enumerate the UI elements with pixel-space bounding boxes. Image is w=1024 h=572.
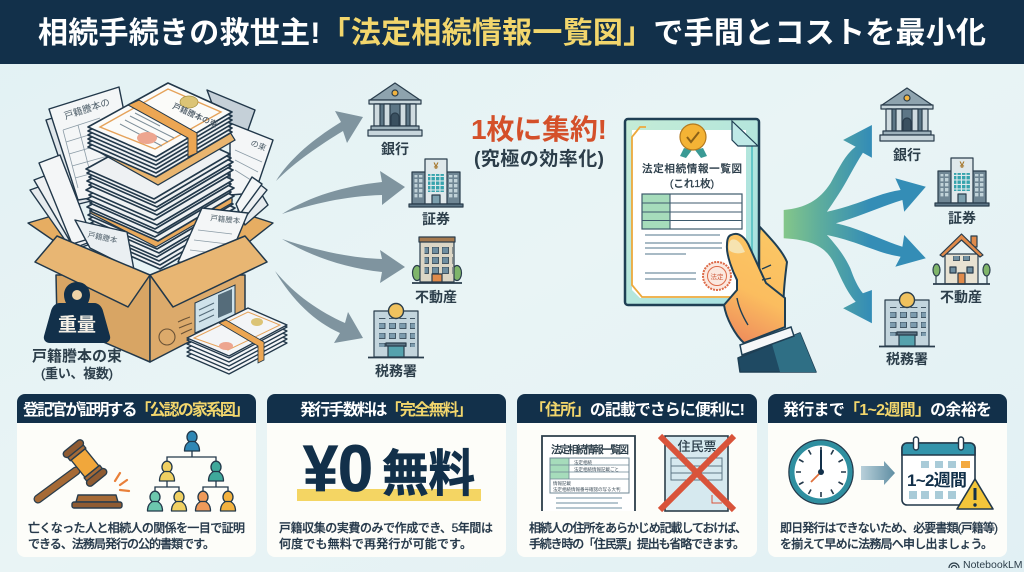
medal	[680, 124, 707, 158]
panel: lead time	[768, 394, 1007, 557]
heading: 登記官が証明する「公認の家系図」	[23, 400, 250, 419]
label: securities: 証券	[948, 210, 976, 226]
red seal: 法定	[710, 272, 724, 281]
thumb and palm	[724, 234, 785, 343]
text block: 即日発行はできないため、必要書類(戸籍等)	[780, 520, 998, 535]
heading	[768, 394, 1007, 423]
icon: bank (right)	[880, 88, 934, 141]
loose family-register sheets behind stack: 戸籍謄本の	[63, 96, 112, 122]
orange envelope upper	[90, 132, 235, 185]
label: bank: 銀行	[381, 141, 409, 157]
big number: ¥0	[303, 431, 373, 505]
loose family-register sheets behind stack: の束	[249, 139, 267, 153]
heading: 「住所」の記載でさらに便利に!	[530, 400, 745, 419]
illustration: one-page certificate in hand	[625, 119, 816, 372]
main paper stack: 戸籍謄本の束	[171, 101, 219, 129]
icon: securities (left)	[409, 159, 463, 207]
text block: 戸籍収集の実費のみで作成でき、5年間は	[279, 520, 493, 535]
big number: 無料	[382, 446, 475, 502]
main paper stack	[86, 83, 236, 269]
heading: 発行手数料は「完全無料」	[300, 400, 473, 419]
label: bundle name: (重い、複数)	[41, 366, 113, 381]
label: real estate: 不動産	[940, 289, 982, 305]
heading: 発行まで「1~2週間」の余裕を	[783, 401, 992, 419]
heading	[517, 394, 757, 423]
title: 相続手続きの救世主!「法定相続情報一覧図」で手間とコストを最小化	[38, 17, 986, 50]
loose sheets in front of stack: 戸籍謄本	[210, 212, 241, 226]
box stamp	[159, 317, 192, 345]
document excerpt: 法定相続情報番号確認の写る大判	[553, 486, 621, 493]
label: tax office: 税務署	[886, 351, 928, 367]
heading	[17, 394, 256, 423]
callout: consolidated: (究極の効率化)	[474, 148, 604, 170]
certificate sheet: (これ1枚)	[670, 177, 714, 190]
crossed-out resident card	[660, 436, 734, 511]
orange envelope lower	[90, 195, 232, 247]
icon: house (right)	[933, 234, 990, 284]
arrow to tax office	[275, 271, 363, 343]
highlight bar	[297, 489, 481, 501]
icon: tax office (left)	[368, 304, 424, 358]
panel: official family tree	[17, 394, 256, 557]
document excerpt: 法定相続情報記載ごと	[574, 466, 619, 473]
weight icon: 重量	[58, 314, 96, 336]
icon: warning	[957, 479, 993, 509]
loose sheets in front of stack: 戸籍謄本	[87, 229, 119, 245]
title bar	[0, 0, 1024, 64]
label: tax office: 税務署	[375, 363, 417, 379]
paper band	[128, 100, 197, 157]
folded corner	[732, 121, 758, 146]
icon: real estate (left)	[412, 237, 462, 283]
callout: consolidated	[471, 114, 607, 170]
heading	[267, 394, 506, 423]
icon: bank (left)	[368, 83, 422, 136]
label: bundle name: 戸籍謄本の束	[32, 347, 122, 365]
label: securities: 証券	[422, 211, 450, 227]
label: bank: 銀行	[893, 147, 921, 163]
icon: tax office (right)	[879, 292, 935, 346]
arrows: after, branching from certificate	[784, 125, 926, 323]
arrow to securities	[282, 171, 405, 214]
small bundle	[187, 308, 287, 374]
box back flaps	[28, 215, 273, 245]
icon: gavel	[38, 438, 122, 508]
red cross	[660, 436, 734, 510]
arrows: before, to institutions	[275, 111, 405, 343]
arrow	[861, 461, 895, 485]
text block	[279, 520, 493, 551]
icon: calendar	[902, 437, 975, 505]
illustration: box of paper bundles	[28, 83, 287, 381]
icon: impact marks	[115, 473, 129, 491]
loose family-register sheets behind stack	[30, 87, 273, 250]
certificate details on top sheet	[100, 89, 221, 149]
panel: address note	[517, 394, 757, 557]
text block: 手続き時の「住民票」提出も省略できます。	[529, 536, 745, 551]
certificate sheet	[625, 119, 759, 305]
shirt cuff	[740, 327, 794, 355]
box faces	[35, 236, 267, 362]
shipping label	[195, 285, 235, 333]
callout: consolidated: 1枚に集約!	[471, 114, 607, 145]
document excerpt	[542, 436, 635, 511]
top sheet	[88, 83, 232, 157]
panel: free of charge	[267, 394, 506, 557]
red seal	[703, 262, 731, 290]
text block: 相続人の住所をあらかじめ記載しておけば、	[529, 520, 747, 535]
big number	[303, 431, 475, 505]
loose sheets in front of stack	[75, 208, 248, 270]
text block: を揃えて早めに法務局へ申し出ましょう。	[780, 536, 993, 551]
text block	[529, 520, 747, 551]
text block: 何度でも無料で再発行が可能です。	[279, 536, 472, 551]
credit: NotebookLM: NotebookLM	[963, 559, 1023, 571]
certificate table	[642, 194, 742, 229]
crossed-out resident card: 住民票	[677, 439, 717, 454]
family tree	[148, 431, 236, 511]
icon: clock	[789, 440, 853, 504]
arrow to bank	[276, 111, 363, 181]
icon: calendar: 1~2週間	[907, 471, 967, 490]
arrow to real estate	[282, 239, 405, 283]
fingers behind sheet	[750, 227, 787, 330]
weight icon	[44, 282, 110, 343]
text block	[28, 520, 245, 551]
document excerpt: 法定相続情報一覧図	[551, 443, 629, 456]
document excerpt: 情報記載	[553, 480, 571, 487]
icon: securities (right)	[935, 158, 989, 206]
text block: 亡くなった人と相続人の関係を一目で証明	[28, 520, 245, 535]
text block: できる、法務局発行の公的書類です。	[28, 536, 215, 551]
certificate title: 法定相続情報一覧図	[642, 162, 742, 175]
suit sleeve	[738, 333, 816, 372]
document excerpt: 法定相続	[574, 459, 592, 466]
label: bundle name	[32, 347, 122, 381]
label: real estate: 不動産	[415, 289, 457, 305]
text block	[780, 520, 998, 551]
certificate lines	[645, 235, 722, 279]
